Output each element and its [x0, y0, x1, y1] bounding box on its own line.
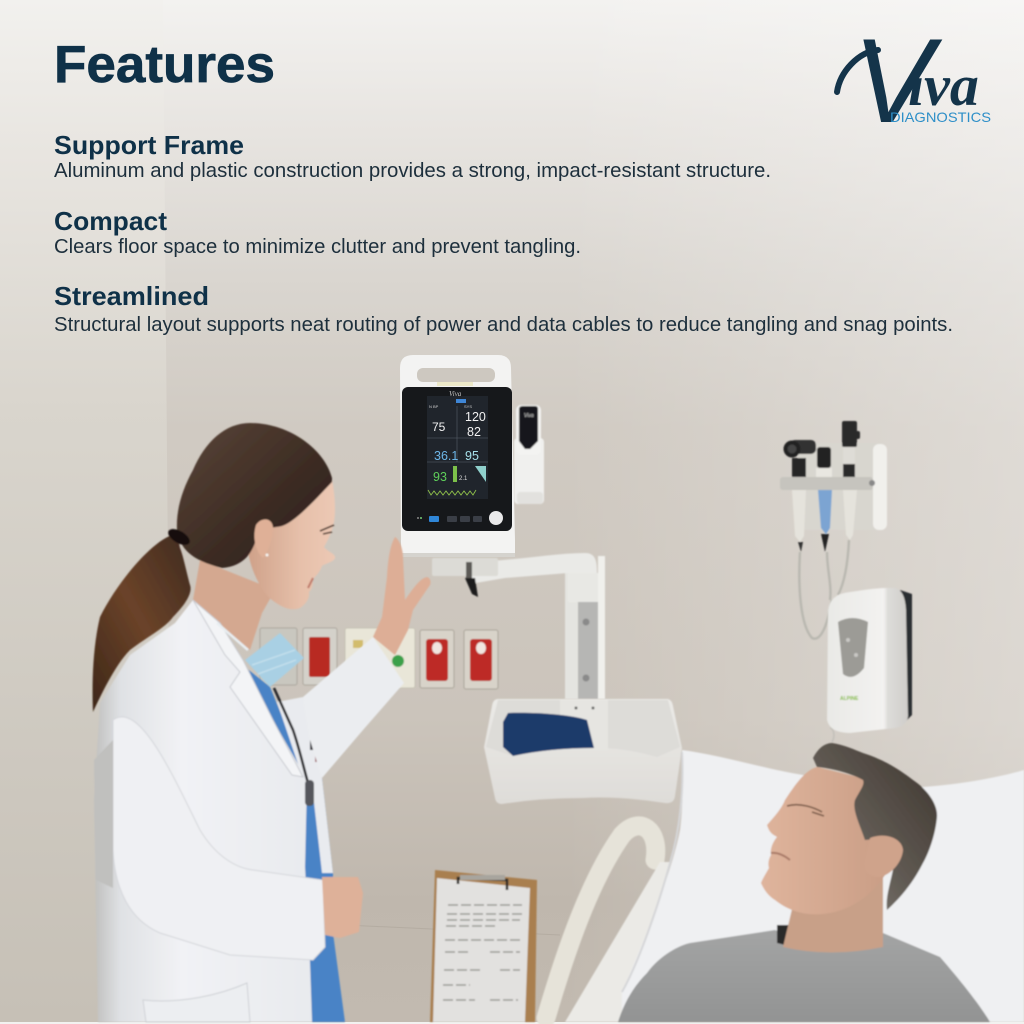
ear	[864, 836, 903, 877]
monitor body	[400, 355, 515, 557]
blood pressure cuff	[503, 713, 594, 756]
vital sign readouts: N BP	[429, 404, 439, 409]
clipboard	[430, 870, 537, 1022]
text block: compact: Compact	[54, 206, 167, 236]
vital sign readouts: 75	[432, 420, 446, 434]
vital sign readouts: 36.1	[434, 449, 458, 463]
pen	[310, 733, 314, 750]
lips	[308, 578, 313, 588]
hair cap	[177, 423, 332, 568]
hand sanitizer dispenser: ALPINE	[840, 696, 859, 702]
eye and brow	[320, 525, 334, 534]
pulse oximeter sensor in holder: Viva	[524, 413, 534, 419]
wall outlets	[260, 628, 498, 689]
title: Features	[54, 36, 275, 94]
ponytail	[93, 534, 191, 712]
neck	[193, 560, 275, 650]
hand sanitizer dispenser	[827, 588, 912, 742]
back shadow	[94, 740, 113, 888]
vital sign readouts: 2.1	[459, 476, 468, 482]
lips	[771, 853, 790, 860]
storage basket with cuff	[484, 699, 682, 804]
surgical mask	[245, 633, 304, 687]
lower hand	[322, 877, 363, 938]
support arm and column	[432, 553, 605, 699]
text block: support frame: Support Frame	[54, 130, 244, 160]
raised sleeve	[303, 637, 404, 778]
vital sign readouts: 82	[467, 425, 481, 439]
text block: compact: Clears floor space to minimize clutter and prevent tangling.	[54, 236, 581, 258]
neck	[783, 870, 883, 952]
patient monitor: Viva	[449, 390, 462, 398]
logo: Viva Diagnostics: DIAGNOSTICS	[890, 109, 991, 125]
monitor screen bezel	[402, 387, 512, 531]
face	[248, 480, 335, 609]
vital sign readouts: SYS	[464, 404, 472, 409]
eye and brow	[787, 805, 824, 816]
text block: support frame	[54, 130, 771, 182]
text block: streamlined	[54, 281, 953, 336]
lower sleeve	[113, 717, 325, 960]
raised hand	[373, 537, 431, 655]
coat body	[94, 600, 312, 1022]
logo: Viva Diagnostics	[837, 14, 991, 148]
logo: Viva Diagnostics: V	[853, 14, 943, 148]
vital sign readouts: 93	[433, 470, 447, 484]
collar dark	[777, 925, 790, 945]
vital sign readouts	[427, 396, 488, 499]
patient in bed	[546, 743, 1024, 1022]
doctor	[93, 423, 431, 1022]
bed sheet	[565, 862, 670, 1022]
ear	[254, 519, 273, 558]
control buttons	[417, 511, 503, 525]
scrubs	[240, 663, 345, 1022]
bed rail	[546, 826, 656, 1018]
stethoscope	[274, 688, 310, 790]
hair	[813, 743, 937, 910]
gray shirt	[618, 930, 990, 1022]
wall-mounted diagnostic set	[780, 421, 887, 639]
text block: streamlined: Streamlined	[54, 281, 209, 311]
coat right front edge	[277, 697, 333, 873]
patient monitor	[400, 355, 515, 557]
text block: compact	[54, 206, 581, 258]
lapel	[193, 600, 303, 777]
patient face	[761, 767, 890, 914]
text block: support frame: Aluminum and plastic construction provides a strong, impact-resistant structure.	[54, 160, 771, 182]
vital sign readouts: 120	[465, 410, 486, 424]
vital sign readouts: 95	[465, 449, 479, 463]
logo: Viva Diagnostics: iva	[908, 53, 979, 118]
coat pocket	[143, 983, 250, 1022]
pillows	[622, 750, 1024, 1022]
hair tie	[166, 526, 192, 548]
text block: streamlined: Structural layout supports neat routing of power and data cables to reduce tangling and snag points.	[54, 314, 953, 336]
pulse oximeter sensor in holder	[514, 405, 544, 504]
